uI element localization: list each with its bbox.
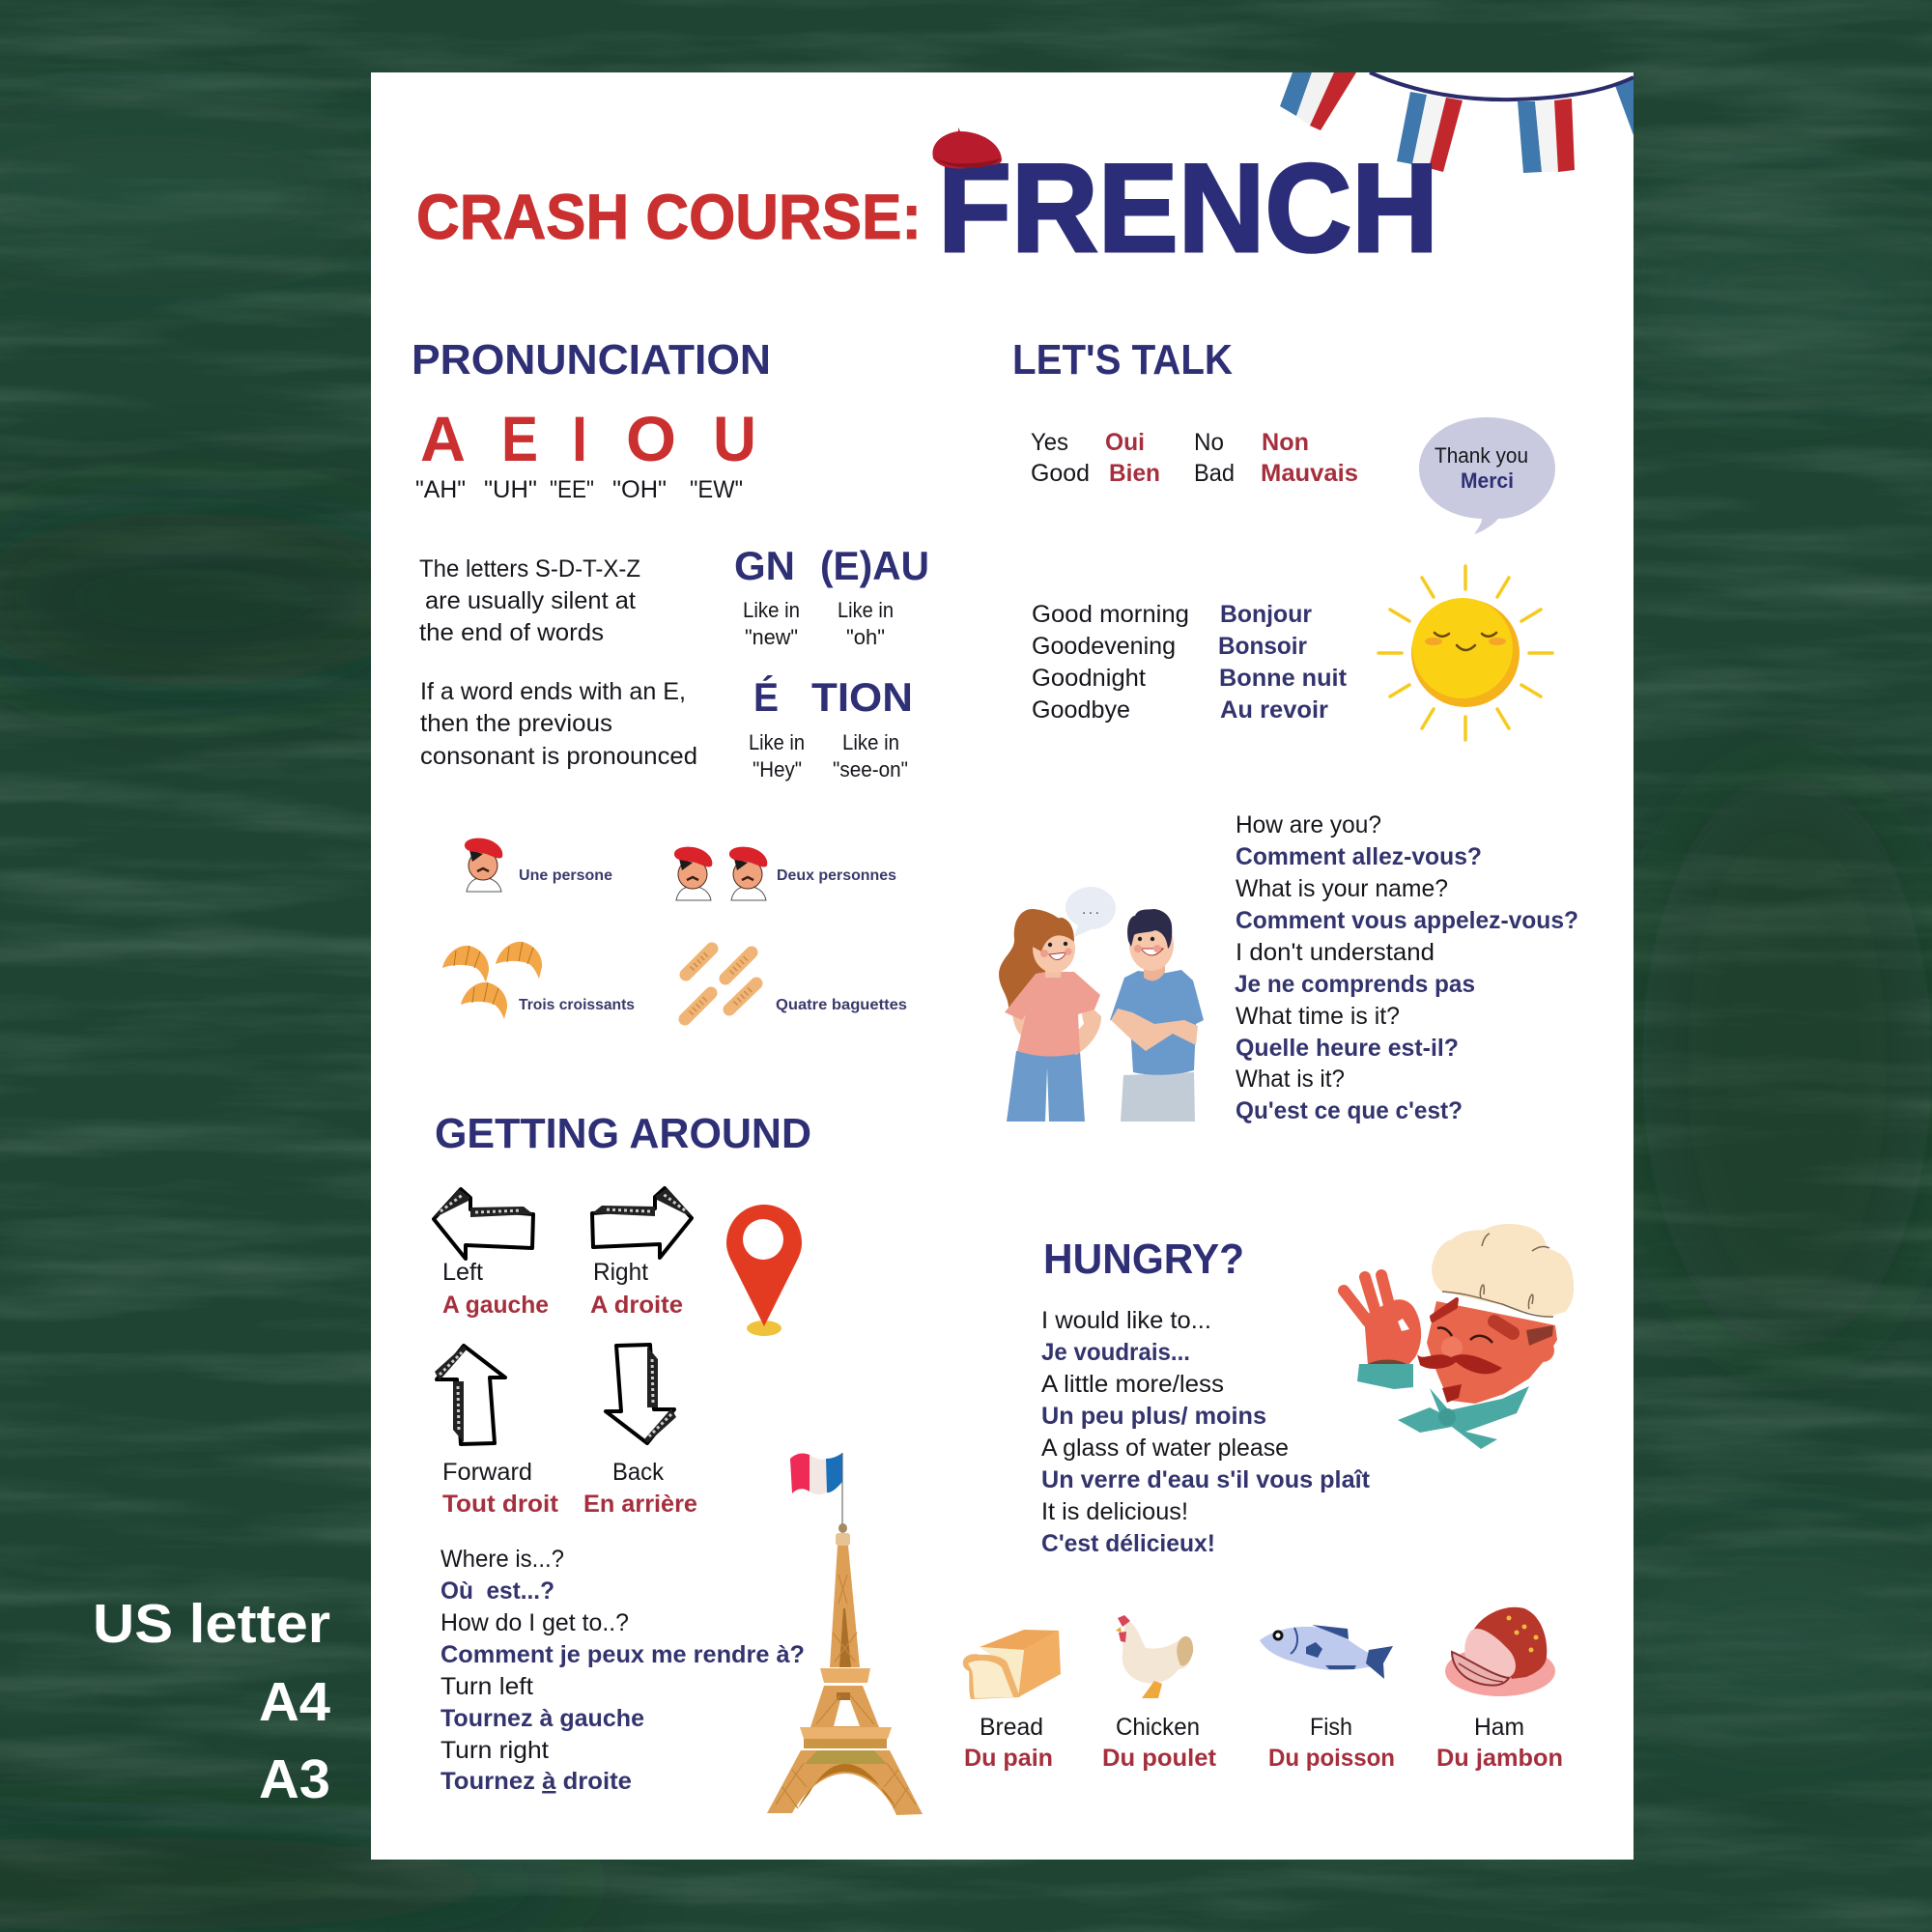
direction phrases [440, 1546, 805, 1795]
icon: beret [932, 128, 1002, 169]
conversation phrases: Qu'est ce que c'est? [1236, 1097, 1463, 1124]
vowels [420, 403, 756, 474]
food labels: Chicken [1116, 1714, 1200, 1741]
eyebrows [1432, 1299, 1457, 1321]
vowel sounds: "OH" [612, 476, 667, 503]
direction phrases: Tournez à gauche [440, 1705, 644, 1732]
basic words: Bad [1194, 460, 1235, 487]
greetings: Bonjour [1220, 601, 1312, 628]
nose [1441, 1337, 1463, 1358]
direction phrases: Comment je peux me rendre à? [440, 1641, 805, 1668]
sound: GN: GN [734, 543, 795, 588]
format labels [93, 1593, 330, 1810]
sound: É: "Hey" [753, 757, 802, 781]
food phrases: It is delicious! [1041, 1498, 1188, 1525]
food labels: Bread [980, 1714, 1043, 1741]
food phrases: Un peu plus/ moins [1041, 1403, 1266, 1430]
icon: smiling sun [1378, 566, 1552, 740]
flag [790, 1453, 843, 1525]
sound: É: Like in [749, 730, 805, 754]
sound: TION [811, 674, 913, 781]
icon: two persons with berets [674, 847, 767, 900]
sound: GN [734, 543, 800, 649]
food labels: Fish [1310, 1714, 1352, 1741]
text: silent letters [419, 555, 640, 646]
direction labels: A droite [590, 1292, 683, 1319]
food labels: Du pain [964, 1745, 1053, 1772]
sound: (E)AU [820, 543, 929, 649]
conversation phrases: Comment vous appelez-vous? [1236, 907, 1578, 934]
icon: map pin [726, 1205, 802, 1336]
icon: left arrow [434, 1189, 533, 1259]
format labels: A4 [259, 1671, 330, 1733]
text: final E rule: If a word ends with an E, [420, 678, 686, 705]
direction phrases: Turn right [440, 1737, 549, 1764]
basic words: Bien [1109, 460, 1160, 487]
text: silent letters: are usually silent at [425, 587, 636, 614]
sound: TION: Like in [842, 730, 899, 754]
hand [1344, 1275, 1421, 1365]
sound: GN: Like in [743, 598, 800, 622]
moustache [1417, 1354, 1502, 1374]
conversation phrases: What is it? [1236, 1065, 1345, 1093]
speech bubble: dots: ... [1082, 901, 1099, 918]
greetings: Au revoir [1220, 696, 1328, 724]
basic words: No [1194, 429, 1224, 456]
greetings: Goodevening [1032, 633, 1176, 660]
greetings: Bonne nuit [1219, 665, 1348, 692]
direction labels: Back [612, 1459, 664, 1486]
icon: up arrow [435, 1346, 505, 1444]
speech bubble: thank you: Thank you [1435, 443, 1528, 468]
direction phrases: Where is...? [440, 1546, 564, 1573]
conversation phrases: Je ne comprends pas [1235, 971, 1475, 998]
white poster sheet [371, 72, 1634, 1860]
vowels: I [572, 403, 587, 474]
icon: fish [1260, 1625, 1393, 1679]
speech bubble: dots [1065, 887, 1116, 937]
vowel sounds: "UH" [484, 476, 537, 503]
sound: TION: "see-on" [833, 757, 908, 781]
text: final E rule [420, 678, 697, 770]
greetings: Goodnight [1032, 665, 1146, 692]
speech bubble: thank you [1419, 417, 1555, 534]
icon: four baguettes [685, 949, 756, 1019]
vowel sounds: "AH" [415, 476, 466, 503]
conversation phrases [1235, 811, 1578, 1124]
direction labels: A gauche [442, 1292, 549, 1319]
format labels: US letter [93, 1593, 330, 1655]
direction labels: Left [442, 1259, 483, 1286]
basic words: Yes [1031, 429, 1068, 456]
vowels: O [626, 403, 676, 474]
icon: chef [1344, 1224, 1574, 1449]
direction labels [442, 1259, 697, 1518]
flag 1 [1280, 72, 1356, 130]
sound: TION: TION [811, 674, 913, 720]
label: une persone: Une persone [519, 867, 612, 884]
food labels: Du poulet [1102, 1745, 1217, 1772]
basic words: Good [1031, 460, 1090, 487]
illustration: two people talking [999, 887, 1204, 1122]
title [416, 137, 1438, 278]
illustration: eiffel tower with flag [767, 1453, 923, 1815]
direction labels: Tout droit [442, 1491, 559, 1518]
food phrases: C'est délicieux! [1041, 1530, 1215, 1557]
bunting decoration [1280, 72, 1634, 173]
direction phrases: How do I get to..? [440, 1609, 629, 1636]
sound: É: É [753, 674, 779, 720]
eyes [1437, 1328, 1492, 1343]
scarf [1398, 1386, 1529, 1449]
label: trois croissants: Trois croissants [519, 997, 635, 1013]
food labels: Du jambon [1436, 1745, 1563, 1772]
greetings: Good morning [1032, 601, 1189, 628]
sound: (E)AU: (E)AU [820, 543, 929, 588]
basic words: Mauvais [1261, 460, 1358, 487]
basic words [1031, 429, 1358, 487]
title: CRASH COURSE: [416, 181, 922, 252]
vowels: E [501, 403, 538, 474]
speech bubble: thank you: Merci [1461, 469, 1514, 493]
flag 2 [1397, 92, 1463, 172]
direction phrases: Où est...? [440, 1577, 554, 1605]
icon: person with beret [465, 838, 502, 892]
greetings: Goodbye [1032, 696, 1130, 724]
food phrases: Je voudrais... [1041, 1339, 1190, 1366]
heading: getting around: GETTING AROUND [435, 1110, 811, 1157]
vowels: U [713, 403, 756, 474]
vowel sounds: "EE" [550, 476, 594, 503]
sound: É [749, 674, 805, 781]
icon: ham [1445, 1607, 1555, 1696]
food labels [964, 1714, 1563, 1772]
sound: (E)AU: Like in [838, 598, 894, 622]
icon: down arrow [606, 1345, 676, 1443]
conversation phrases: How are you? [1236, 811, 1381, 838]
hat [1432, 1224, 1574, 1317]
vowels: A [420, 403, 466, 474]
conversation phrases: What is your name? [1236, 875, 1448, 902]
conversation phrases: What time is it? [1236, 1003, 1400, 1030]
conversation phrases: Comment allez-vous? [1236, 843, 1482, 870]
flag 3 [1518, 99, 1575, 173]
heading: pronunciation: PRONUNCIATION [412, 336, 771, 384]
greetings: Bonsoir [1218, 633, 1307, 660]
sound: GN: "new" [745, 625, 798, 649]
heading: hungry: HUNGRY? [1043, 1236, 1244, 1283]
heading: let's talk: LET'S TALK [1012, 336, 1233, 384]
sound: (E)AU: "oh" [846, 625, 885, 649]
conversation phrases: Quelle heure est-il? [1236, 1035, 1459, 1062]
man [1110, 909, 1204, 1122]
food phrases: Un verre d'eau s'il vous plaît [1041, 1466, 1371, 1493]
direction labels: En arrière [583, 1491, 697, 1518]
food labels: Du poisson [1268, 1745, 1395, 1772]
food phrases [1041, 1307, 1371, 1557]
icon: bread [963, 1630, 1061, 1699]
greetings [1032, 601, 1348, 724]
food phrases: A glass of water please [1041, 1435, 1289, 1462]
text: silent letters: the end of words [419, 619, 604, 646]
title: FRENCH [938, 137, 1438, 278]
label: deux personnes: Deux personnes [777, 867, 896, 884]
woman [999, 909, 1101, 1122]
text: final E rule: then the previous [420, 710, 612, 737]
basic words: Oui [1105, 429, 1145, 456]
basic words: Non [1262, 429, 1309, 456]
direction phrases: Tournez à droite [440, 1768, 632, 1795]
format labels: A3 [259, 1748, 330, 1810]
goatee [1442, 1384, 1462, 1403]
text: silent letters: The letters S-D-T-X-Z [419, 555, 640, 582]
icon: right arrow [592, 1188, 692, 1258]
direction phrases: Turn left [440, 1673, 533, 1700]
direction labels: Right [593, 1259, 648, 1286]
direction labels: Forward [442, 1459, 532, 1486]
label: quatre baguettes: Quatre baguettes [776, 997, 907, 1013]
icon: three croissants [442, 942, 542, 1019]
string [1370, 72, 1634, 99]
cuff [1357, 1364, 1413, 1389]
face [1427, 1301, 1557, 1404]
flag 4 [1614, 76, 1634, 135]
food phrases: A little more/less [1041, 1371, 1224, 1398]
food phrases: I would like to... [1041, 1307, 1211, 1334]
vowel sounds [415, 476, 743, 503]
conversation phrases: I don't understand [1236, 939, 1435, 966]
vowel sounds: "EW" [690, 476, 743, 503]
food labels: Ham [1474, 1714, 1524, 1741]
icon: chicken [1116, 1615, 1193, 1698]
text: final E rule: consonant is pronounced [420, 743, 697, 770]
